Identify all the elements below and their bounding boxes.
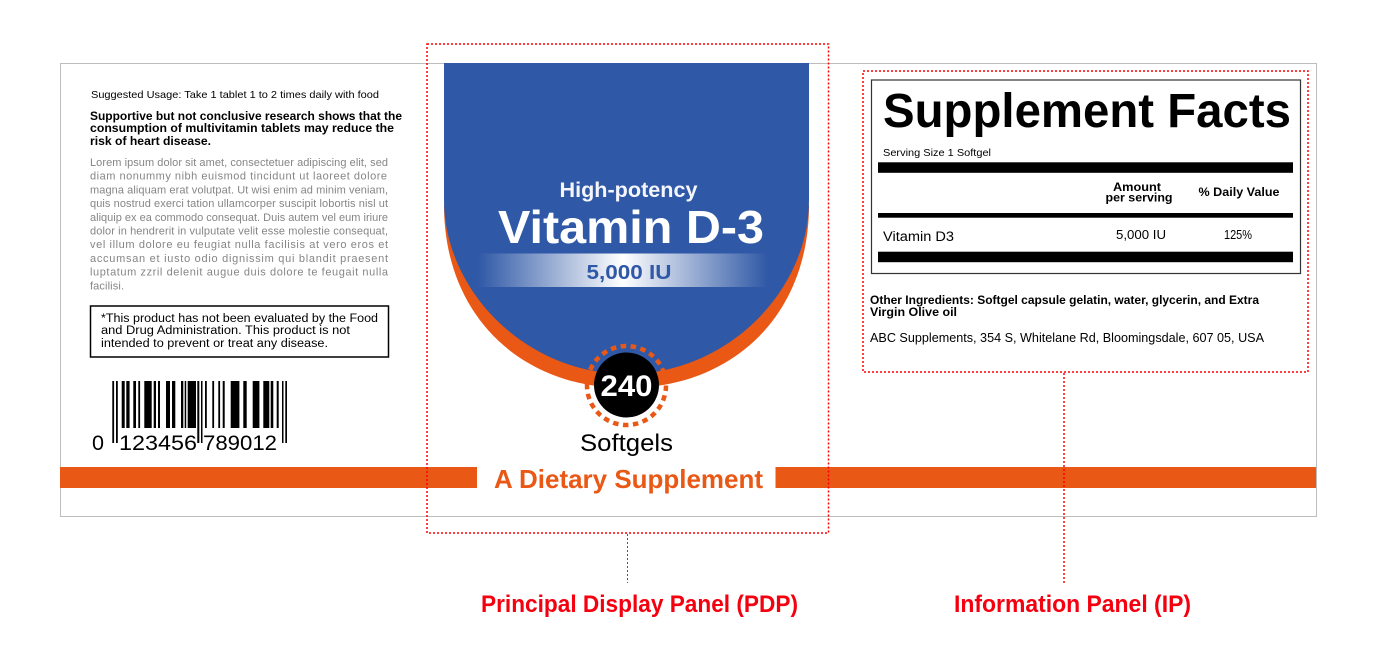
ip dashed outline [863, 71, 1308, 372]
other ingredients: Virgin Olive oil [870, 305, 957, 319]
panel: principal display shield [444, 63, 809, 388]
research statement: Supportive but not conclusive research shows that the [90, 109, 402, 123]
panel: supplement facts [872, 80, 1300, 274]
lorem ipsum paragraph: vel illum dolore eu feugiat nulla facilisis at vero eros et [90, 239, 388, 251]
barcode digits [92, 432, 277, 455]
lorem ipsum paragraph: Lorem ipsum dolor sit amet, consectetuer adipiscing elit, sed [90, 157, 388, 169]
label outline [60, 64, 1316, 516]
high-potency: High-potency [560, 178, 698, 202]
barcode [112, 381, 287, 443]
FDA disclaimer box: intended to prevent or treat any disease. [101, 338, 328, 350]
panel: supplement facts: 125% [1224, 228, 1252, 242]
panel: left usage text [90, 89, 402, 292]
count badge [587, 346, 666, 425]
facts title: Supplement Facts [883, 85, 1291, 138]
shield orange shadow [444, 205, 809, 388]
serving size: Serving Size 1 Softgel [883, 147, 991, 159]
barcode digits: 123456 [119, 432, 197, 455]
vitamin d-3: Vitamin D-3 [498, 201, 764, 253]
lorem ipsum paragraph: aliquip ex ea commodo consequat. Duis autem vel eum iriure [90, 212, 388, 224]
lorem ipsum paragraph: facilisi. [90, 280, 124, 292]
5,000 iu: 5,000 IU [586, 262, 672, 284]
FDA disclaimer box [90, 306, 388, 357]
softgels: Softgels [580, 430, 673, 457]
amount header: per serving [1106, 192, 1172, 204]
lorem ipsum paragraph: diam nonummy nibh euismod tincidunt ut laoreet dolore [90, 171, 387, 183]
barcode digits: 0 [92, 432, 104, 455]
other ingredients: Other Ingredients: Softgel capsule gelatin, water, glycerin, and Extra [870, 293, 1259, 307]
orange band right [776, 467, 1316, 488]
lorem ipsum paragraph: luptatum zzril delenit augue duis dolore te feugait nulla [90, 267, 389, 279]
lorem ipsum paragraph: dolor in hendrerit in vulputate velit esse molestie consequat, [90, 226, 388, 238]
research statement: risk of heart disease. [90, 134, 211, 148]
FDA disclaimer box: and Drug Administration. This product is not [101, 325, 351, 337]
lorem ipsum paragraph: accumsan et iusto odio dignissim qui blandit praesent [90, 253, 388, 265]
suggested usage: Suggested Usage: Take 1 tablet 1 to 2 times daily with food [91, 89, 379, 101]
barcode digits: 789012 [203, 432, 277, 455]
orange band left [60, 467, 477, 488]
lorem ipsum paragraph: magna aliquam erat volutpat. Ut wisi enim ad minim veniam, [90, 184, 388, 196]
research statement [90, 109, 402, 148]
other ingredients [870, 293, 1259, 319]
ip leader line [1063, 373, 1065, 583]
amount header [1106, 182, 1172, 204]
manufacturer address: ABC Supplements, 354 S, Whitelane Rd, Bloomingsdale, 607 05, USA [870, 331, 1265, 345]
pdp leader line [626, 534, 628, 583]
a dietary supplement: A Dietary Supplement [494, 464, 763, 494]
ip caption: Information Panel (IP) [954, 591, 1191, 618]
FDA disclaimer box: *This product has not been evaluated by the Food [101, 313, 378, 325]
lorem ipsum paragraph [90, 157, 389, 292]
potency band [478, 254, 768, 287]
lorem ipsum paragraph: quis nostrud exerci tation ullamcorper suscipit lobortis nisl ut [90, 198, 388, 210]
shield blue [444, 63, 809, 374]
research statement: consumption of multivitamin tablets may reduce the [90, 121, 394, 135]
pdp dashed outline [427, 44, 828, 533]
amount header: Amount [1113, 182, 1161, 194]
daily value header: % Daily Value [1198, 187, 1280, 199]
panel: supplement facts: 5,000 IU [1116, 228, 1166, 242]
count badge: 240 [600, 370, 652, 403]
vitamin d3 row: Vitamin D3 [883, 229, 954, 244]
pdp caption: Principal Display Panel (PDP) [481, 591, 798, 618]
